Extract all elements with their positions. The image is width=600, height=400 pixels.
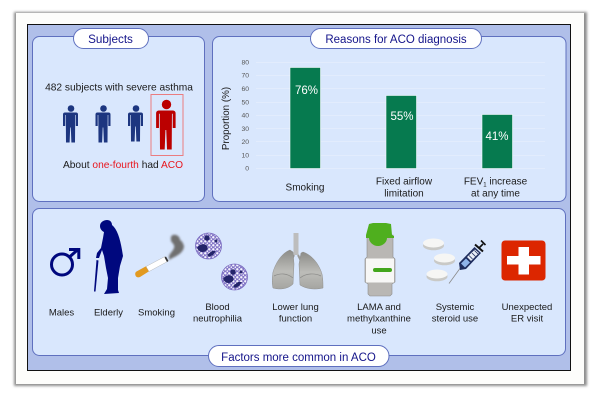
heading: reasons — [310, 28, 482, 48]
category label: FEV1: FEV — [464, 176, 483, 188]
heading: subjects — [74, 28, 148, 48]
label: elderly: Elderly — [94, 308, 123, 318]
y axis tick labels: 40 — [241, 112, 249, 120]
y axis tick labels: 80 — [241, 60, 249, 66]
label: blood neutrophilia: neutrophilia — [193, 314, 243, 325]
category label: fixed airflow: limitation — [384, 188, 424, 200]
framed background — [28, 24, 570, 370]
bar: smoking 76%: 76% — [295, 85, 318, 97]
panel: subjects — [32, 28, 204, 202]
label: systemic steroid use: steroid use — [432, 314, 478, 325]
category label: FEV1: 1 — [483, 182, 487, 188]
y axis tick labels: 50 — [241, 100, 249, 106]
label: smoking: Smoking — [138, 308, 175, 318]
y axis tick labels — [241, 60, 249, 172]
heading: reasons: Reasons for ACO diagnosis — [325, 34, 467, 46]
label: lower lung function: function — [279, 314, 312, 325]
icon: inhaler — [365, 223, 395, 296]
bar: FEV1 41%: 41% — [485, 131, 509, 143]
icon: red cross — [502, 240, 546, 280]
label: unexpected ER visit: Unexpected — [502, 302, 552, 313]
bar: fixed airflow 55% — [386, 96, 416, 168]
category label: fixed airflow: Fixed airflow — [376, 176, 432, 188]
label: unexpected ER visit: ER visit — [511, 314, 543, 325]
icon: lungs — [272, 233, 323, 289]
icon: cigarette with smoke — [135, 235, 184, 277]
category label: FEV1: at any time — [471, 188, 520, 200]
y axis tick labels: 10 — [241, 152, 249, 160]
bar chart — [221, 60, 545, 200]
icon: blue person 1 — [63, 105, 78, 142]
y axis tick labels: 30 — [241, 126, 249, 133]
icon: elderly silhouette — [94, 220, 123, 294]
category label: smoking: Smoking — [286, 182, 324, 194]
panel: reasons for ACO diagnosis — [212, 28, 566, 202]
label: blood neutrophilia: Blood — [205, 302, 230, 313]
text: about one-fourth: About one-fourth had ACO — [63, 160, 183, 171]
y axis tick labels: 70 — [241, 72, 249, 80]
heading: subjects: Subjects — [88, 33, 133, 46]
panel: factors — [32, 208, 566, 366]
label: lower lung function: Lower lung — [272, 302, 319, 313]
bar: FEV1 41% — [482, 114, 512, 168]
icon: male symbol — [52, 249, 79, 275]
y axis tick labels: 0 — [245, 166, 249, 172]
y axis title: Proportion (%) — [221, 87, 232, 150]
category label: FEV1: increase — [487, 176, 528, 188]
y axis tick labels: 20 — [241, 139, 249, 146]
heading: factors — [208, 346, 389, 366]
label: males: Males — [49, 308, 74, 318]
heading: factors: Factors more common in ACO — [221, 352, 376, 364]
bar: smoking 76% — [290, 68, 320, 168]
label: LAMA: methylxanthine — [347, 314, 411, 325]
icon: blue person 3 — [128, 105, 143, 142]
icon: neutrophil cells — [196, 233, 248, 290]
icon: pills and syringe — [423, 238, 486, 284]
text: 482 subjects: 482 subjects with severe asthma — [45, 82, 193, 94]
highlight box with red person — [151, 94, 183, 156]
label: LAMA: use — [371, 325, 387, 336]
bar: fixed airflow 55%: 55% — [390, 111, 414, 123]
icon: blue person 2 — [96, 105, 110, 142]
y axis tick labels: 60 — [241, 86, 249, 93]
label: systemic steroid use: Systemic — [436, 302, 474, 313]
label: LAMA: LAMA and — [357, 302, 401, 313]
